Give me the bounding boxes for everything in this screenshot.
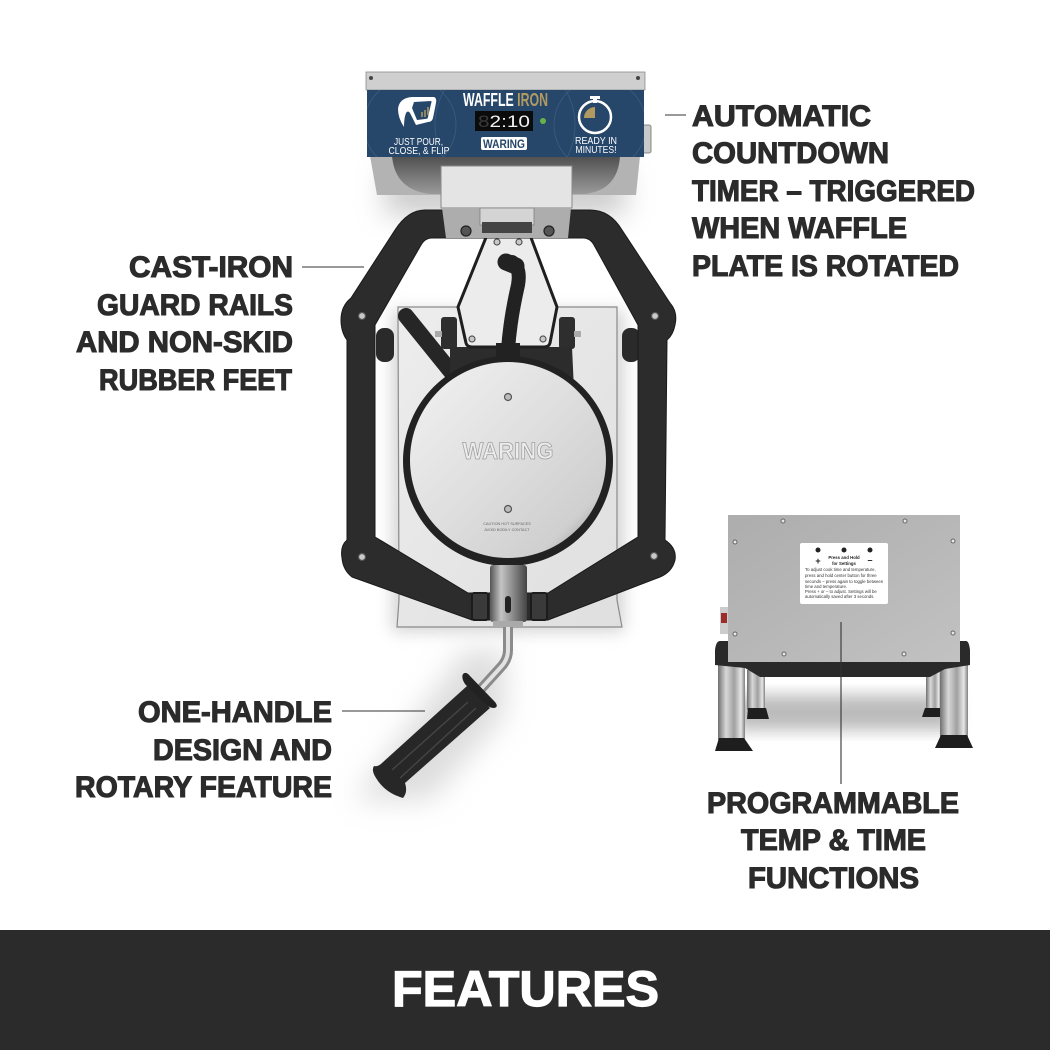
- back legs: [747, 670, 765, 710]
- callout: one handle: ROTARY FEATURE: [75, 771, 332, 804]
- callout: programmable: FUNCTIONS: [748, 862, 919, 895]
- panel title: WAFFLE IRON: [463, 90, 548, 110]
- soft shadows: [355, 170, 955, 800]
- center block: [441, 166, 572, 208]
- waffle iron main unit: [341, 210, 676, 627]
- front legs: [718, 665, 745, 740]
- settings label: automatically saved after 3 seconds.: [805, 594, 875, 599]
- caution text: AVOID BODILY CONTACT: [484, 528, 530, 532]
- led display: 82:10: [478, 112, 530, 131]
- callout: guard rails: [76, 251, 293, 397]
- base plate: [397, 307, 622, 627]
- ready caption: READY IN: [575, 136, 617, 147]
- callout: guard rails: GUARD RAILS: [97, 289, 293, 322]
- pour caption: JUST POUR,: [394, 137, 443, 148]
- settings label: press and hold center button for three: [805, 573, 877, 578]
- callout: countdown timer: PLATE IS ROTATED: [692, 250, 959, 283]
- callout: countdown timer: [692, 100, 975, 283]
- handle: [373, 621, 523, 798]
- callout: countdown timer: WHEN WAFFLE: [692, 212, 907, 245]
- caution text: [483, 522, 531, 532]
- rubber feet: [376, 328, 640, 582]
- icon: stopwatch: [579, 96, 611, 133]
- top plate: [366, 72, 645, 90]
- clamp blocks: [472, 593, 547, 620]
- callout: programmable: TEMP & TIME: [741, 824, 926, 857]
- settings label: +: [815, 556, 821, 566]
- screws: [358, 239, 658, 560]
- hinge arm plate: [458, 235, 557, 347]
- settings label: time and temperature.: [805, 584, 847, 589]
- settings label: seconds – press again to toggle between: [805, 579, 884, 584]
- callout: programmable: [707, 787, 959, 895]
- callout: one handle: ONE-HANDLE: [138, 696, 332, 729]
- back panel: [728, 515, 960, 662]
- waffle plate: [403, 356, 613, 566]
- waring badge: WARING: [483, 137, 525, 151]
- settings label: Press and Hold: [828, 555, 860, 560]
- control housing: [364, 55, 651, 238]
- waring emboss: WARING: [462, 438, 554, 465]
- ready caption: MINUTES!: [576, 145, 616, 156]
- guard rail: [341, 210, 676, 620]
- green led: [540, 118, 546, 124]
- hose: [506, 262, 519, 350]
- pivot rollers: [435, 317, 581, 349]
- caution text: CAUTION HOT SURFACES: [483, 522, 531, 526]
- footer band: [0, 930, 1050, 1050]
- yoke: [450, 347, 574, 390]
- back unit: [715, 515, 973, 751]
- settings label: for Settings: [832, 561, 857, 566]
- pour caption: CLOSE, & FLIP: [388, 146, 450, 157]
- callout: one handle: [75, 696, 332, 804]
- callout: programmable: PROGRAMMABLE: [707, 787, 959, 820]
- settings label: Press + or – to adjust. Settings will be: [805, 589, 877, 594]
- settings label: To adjust cook time and temperature,: [805, 567, 876, 572]
- angled rod: [406, 316, 452, 373]
- leader lines: [302, 115, 841, 784]
- callout: guard rails: CAST-IRON: [129, 251, 293, 284]
- base: [715, 641, 970, 677]
- panel screws: [733, 519, 955, 656]
- panel pattern: [367, 90, 644, 157]
- settings label: [800, 543, 888, 604]
- neck: [490, 565, 527, 622]
- callout: countdown timer: TIMER – TRIGGERED: [692, 175, 975, 208]
- icon: pour: [398, 97, 436, 127]
- bolts: [461, 226, 554, 236]
- callout: guard rails: RUBBER FEET: [99, 364, 292, 397]
- callout: one handle: DESIGN AND: [153, 734, 332, 767]
- switch: [720, 607, 728, 634]
- settings label: –: [867, 555, 873, 565]
- heading: FEATURES: [392, 961, 659, 1017]
- side button: [643, 125, 651, 153]
- housing lower: [370, 156, 640, 195]
- callout: guard rails: AND NON-SKID: [76, 326, 293, 359]
- callout: countdown timer: AUTOMATIC: [692, 100, 871, 133]
- callout: countdown timer: COUNTDOWN: [692, 137, 889, 170]
- blue panel: [367, 90, 644, 157]
